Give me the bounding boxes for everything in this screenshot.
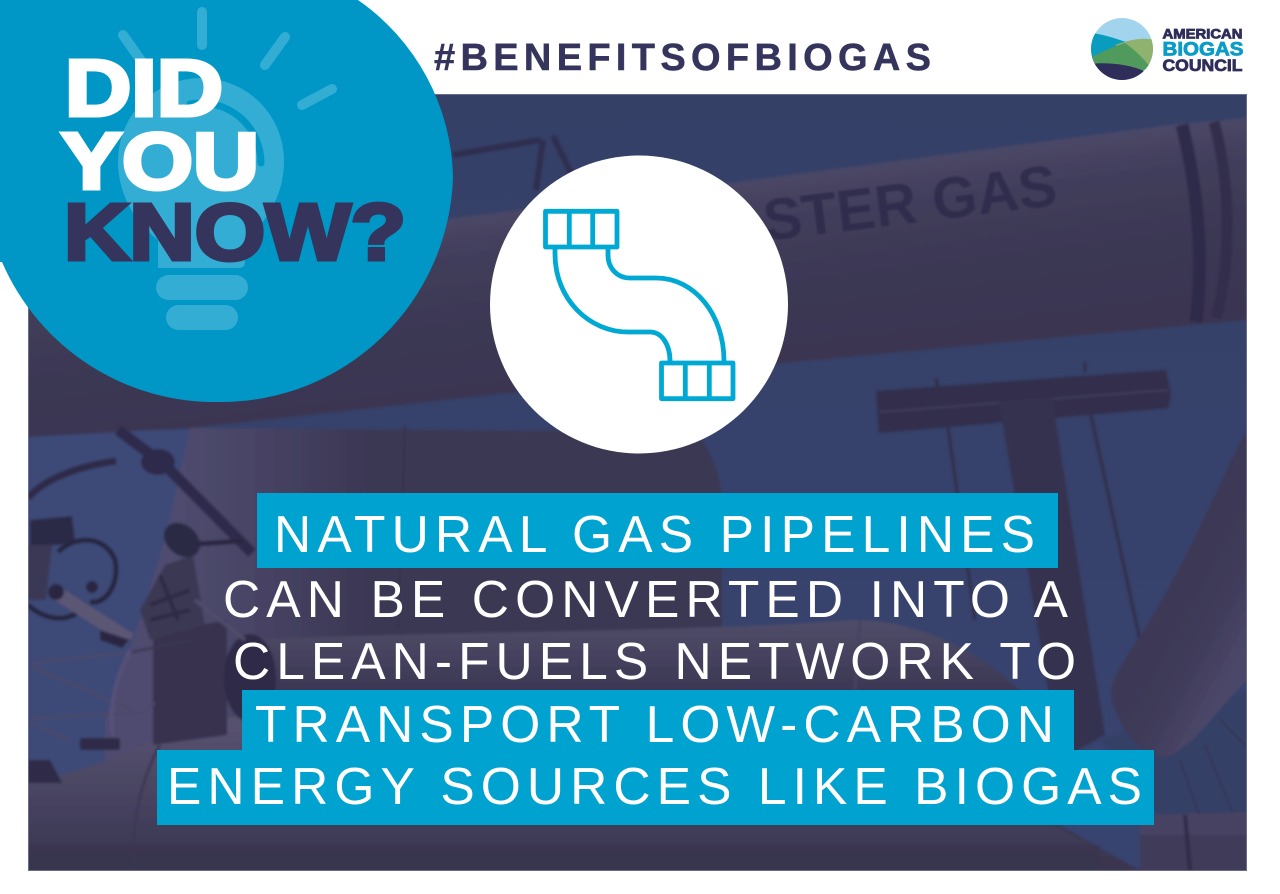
faint stencil marks at pipe base: [232, 828, 600, 848]
line 1: NATURAL GAS PIPELINES: [274, 505, 1035, 563]
did you know text: [61, 44, 406, 276]
highlight bar: line 4: [242, 690, 1074, 750]
logo: American Biogas Council: AMERICAN: [1162, 26, 1242, 42]
stencil lettering on pipe: STER GAS: [760, 153, 1060, 254]
line 2: CAN BE CONVERTED INTO A: [223, 570, 1069, 628]
icon: light bulb: [118, 12, 332, 330]
hashtag heading: #BENEFITSOFBIOGAS: [434, 37, 931, 79]
highlight bar: line 5: [157, 750, 1154, 825]
line 3: CLEAN-FUELS NETWORK TO: [233, 632, 1076, 690]
line 4: TRANSPORT LOW-CARBON: [255, 695, 1054, 753]
icon: pipe in white circle: [490, 156, 788, 454]
line 5: ENERGY SOURCES LIKE BIOGAS: [167, 757, 1142, 815]
did you know text: DID: [65, 44, 223, 132]
did you know text: YOU: [61, 116, 259, 206]
logo: American Biogas Council: COUNCIL: [1162, 56, 1242, 75]
did you know text: KNOW?: [64, 188, 406, 276]
logo: American Biogas Council: BIOGAS: [1162, 40, 1244, 60]
text block: main message: [157, 493, 1154, 825]
did you know circle: [0, 0, 453, 402]
logo: American Biogas Council: [1090, 17, 1244, 84]
highlight bar: line 1: [257, 493, 1058, 568]
